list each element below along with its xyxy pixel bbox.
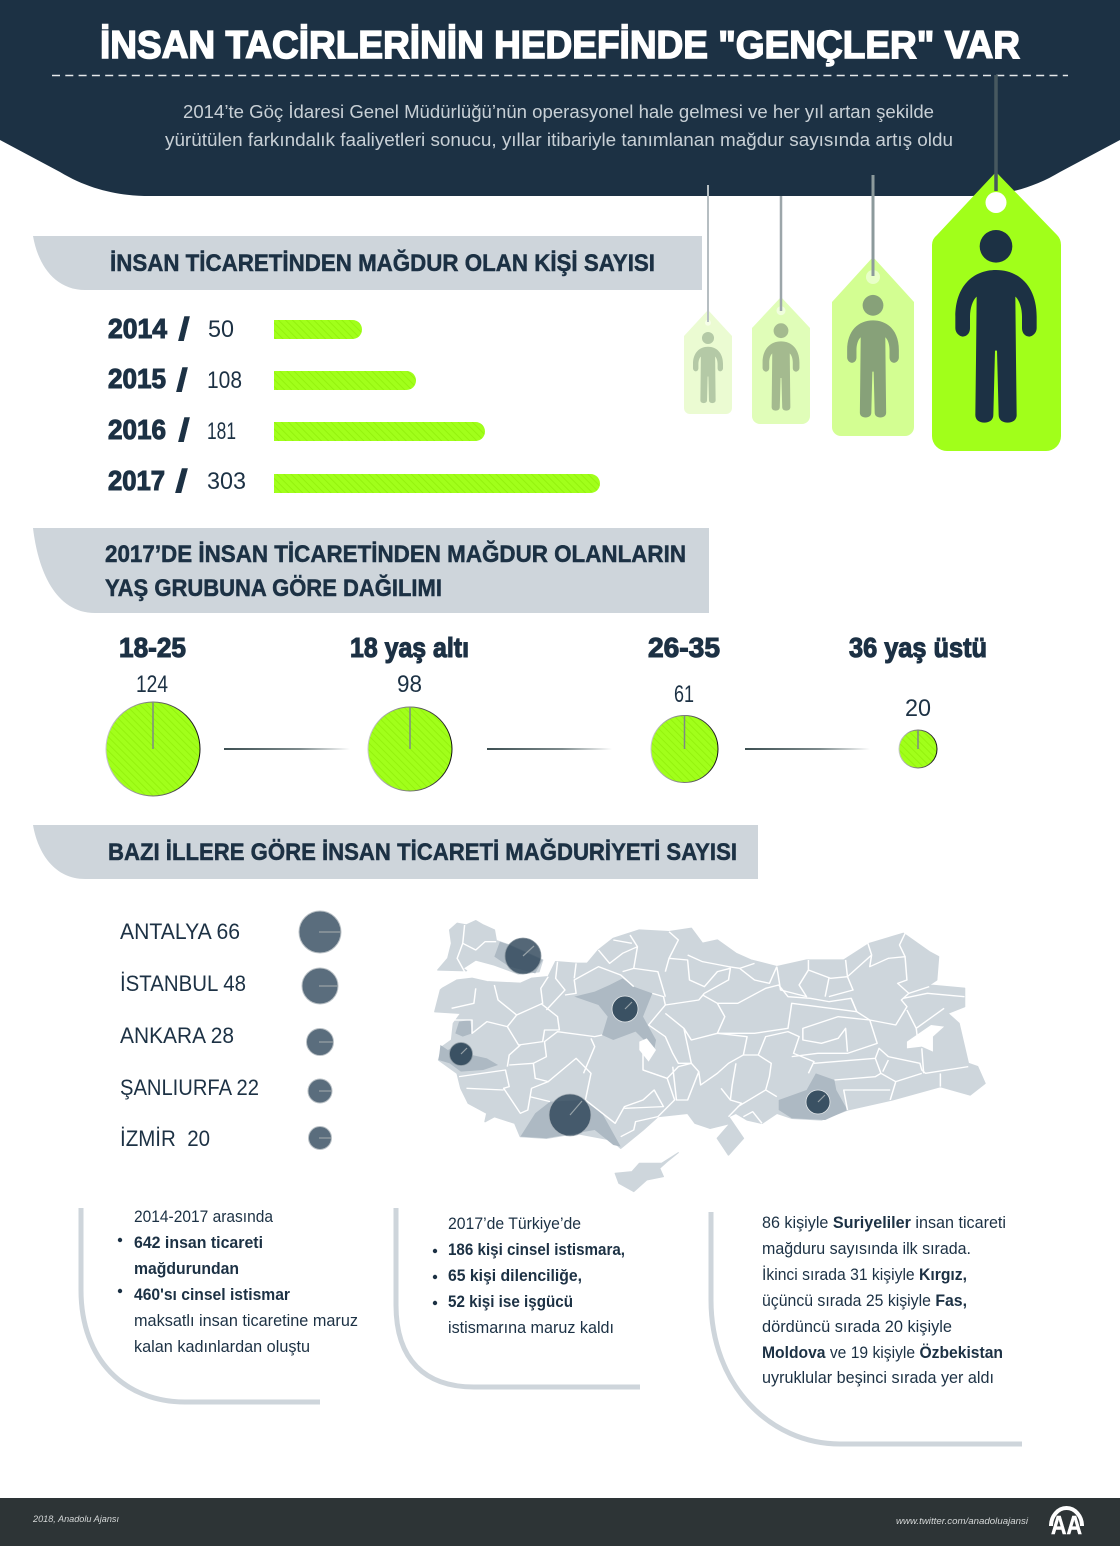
map marker: Ankara <box>612 996 638 1022</box>
row 2016: 181 <box>207 418 236 445</box>
age group under 18 <box>350 632 469 791</box>
text panel: exploitation types: 2017’de Türkiye’de <box>448 1215 581 1233</box>
header background <box>0 0 1120 196</box>
row 2015: 108 <box>207 367 242 394</box>
Sanliurfa: ŞANLIURFA 22 <box>120 1075 259 1100</box>
text panel: nationalities: İkinci sırada 31 kişiyle Kırgız, <box>762 1265 967 1284</box>
age group over 36: 20 <box>905 695 931 722</box>
heading: age groups: 2017’DE İNSAN TİCARETİNDEN MAĞDUR OLANLARIN <box>105 540 686 568</box>
map marker: Sanliurfa <box>806 1090 830 1114</box>
row 2016 <box>108 412 485 448</box>
row 2014 <box>108 311 362 347</box>
text panel: totals: 2014-2017 arasında <box>134 1208 274 1226</box>
Izmir <box>120 1126 332 1151</box>
text panel: totals: mağdurundan <box>134 1260 239 1278</box>
map marker: Izmir <box>450 1042 472 1066</box>
text panel: totals <box>81 1208 358 1402</box>
lakes <box>639 1038 656 1062</box>
province borders <box>452 925 968 1137</box>
Istanbul <box>120 968 338 1004</box>
text panel: totals: 642 insan ticareti <box>134 1234 263 1252</box>
heading: age groups: YAŞ GRUBUNA GÖRE DAĞILIMI <box>105 574 442 602</box>
text panel: exploitation types: 52 kişi ise işgücü <box>448 1293 573 1311</box>
text panel: nationalities: 86 kişiyle Suriyeliler insan ticareti <box>762 1214 1006 1232</box>
row 2016: / <box>178 412 190 448</box>
icon: Anadolu Agency logo: AA <box>1051 1510 1082 1540</box>
Ankara <box>120 1023 334 1056</box>
intro text <box>165 102 953 150</box>
heading: age groups <box>33 528 709 613</box>
map marker: Istanbul <box>505 938 541 974</box>
header divider <box>52 74 1068 76</box>
age group 18-25: 124 <box>136 671 168 698</box>
intro text: 2014’te Göç İdaresi Genel Müdürlüğü’nün operasyonel hale gelmesi ve her yıl artan şekilde <box>183 102 934 122</box>
row 2015: / <box>176 362 188 398</box>
row 2014: / <box>178 311 190 347</box>
bar chart: victims per year <box>108 311 600 499</box>
age group 26-35 <box>648 632 720 782</box>
text panel: exploitation types: 65 kişi dilenciliğe, <box>448 1267 582 1285</box>
text panel: nationalities: uyruklular beşinci sırada yer aldı <box>762 1369 994 1387</box>
text panel: nationalities: üçüncü sırada 25 kişiyle Fas, <box>762 1292 967 1310</box>
connector <box>745 748 870 750</box>
row 2014: 50 <box>208 316 234 343</box>
age group under 18: 18 yaş altı <box>350 632 469 663</box>
age group under 18: 98 <box>397 671 422 698</box>
Antalya <box>120 911 341 953</box>
icon: price tag small person 2 <box>752 196 810 424</box>
age group 26-35: 61 <box>674 681 694 708</box>
age group over 36 <box>849 632 987 768</box>
row 2017: 2017 <box>108 465 165 496</box>
Sanliurfa <box>120 1075 332 1103</box>
text panel: exploitation types: istismarına maruz kaldı <box>448 1319 614 1337</box>
Ankara: ANKARA 28 <box>120 1023 234 1048</box>
connector <box>224 748 350 750</box>
map of Turkey <box>435 921 985 1192</box>
row 2017 <box>108 463 600 499</box>
footer <box>0 1498 1120 1546</box>
text panel: nationalities <box>711 1212 1022 1444</box>
icon: price tag small person 1 <box>684 185 732 414</box>
Istanbul: İSTANBUL 48 <box>120 971 246 996</box>
row 2015 <box>108 362 416 398</box>
age group 26-35: 26-35 <box>648 632 720 663</box>
Anatolia <box>435 928 985 1155</box>
icon: price tag large person 4 <box>932 75 1061 451</box>
text panel: totals: 460'sı cinsel istismar <box>134 1286 291 1304</box>
footer: www.twitter.com/anadoluajansi <box>896 1516 1029 1527</box>
heading: cities: BAZI İLLERE GÖRE İNSAN TİCARETİ MAĞDURİYETİ SAYISI <box>108 838 737 866</box>
footer: 2018, Anadolu Ajansı <box>32 1514 119 1524</box>
heading: victims per year: İNSAN TİCARETİNDEN MAĞDUR OLAN KİŞİ SAYISI <box>110 249 655 277</box>
text panel: nationalities: Moldova ve 19 kişiyle Özbekistan <box>762 1343 1003 1362</box>
row 2017: 303 <box>207 468 246 495</box>
row 2015: 2015 <box>108 363 166 394</box>
title: İNSAN TACİRLERİNİN HEDEFİNDE "GENÇLER" VAR <box>100 24 1020 67</box>
row 2016: 2016 <box>108 414 166 445</box>
heading: victims per year <box>33 236 702 290</box>
heading: cities <box>33 825 758 879</box>
city legend <box>120 911 341 1151</box>
text panel: totals: kalan kadınlardan oluştu <box>134 1338 310 1356</box>
row 2014: 2014 <box>108 313 167 344</box>
Antalya: ANTALYA 66 <box>120 919 240 944</box>
age group 18-25 <box>106 632 200 796</box>
text panel: exploitation types <box>396 1208 640 1387</box>
text panel: exploitation types: 186 kişi cinsel istismara, <box>448 1241 625 1259</box>
Thrace <box>438 921 543 974</box>
text panel: totals: maksatlı insan ticaretine maruz <box>134 1312 358 1330</box>
intro text: yürütülen farkındalık faaliyetleri sonucu, yıllar itibariyle tanımlanan mağdur sayısında artış oldu <box>165 130 953 150</box>
icon: price tag medium person 3 <box>832 175 914 436</box>
text panel: nationalities: mağduru sayısında ilk sırada. <box>762 1240 971 1258</box>
highlighted provinces <box>439 942 847 1147</box>
map marker: Antalya <box>549 1094 591 1136</box>
text panel: nationalities: dördüncü sırada 20 kişiyle <box>762 1318 952 1336</box>
age group over 36: 36 yaş üstü <box>849 632 987 663</box>
row 2017: / <box>175 463 188 499</box>
connector <box>487 748 612 750</box>
Cyprus <box>615 1153 678 1192</box>
Izmir: İZMİR 20 <box>120 1126 210 1151</box>
age group 18-25: 18-25 <box>119 632 186 663</box>
